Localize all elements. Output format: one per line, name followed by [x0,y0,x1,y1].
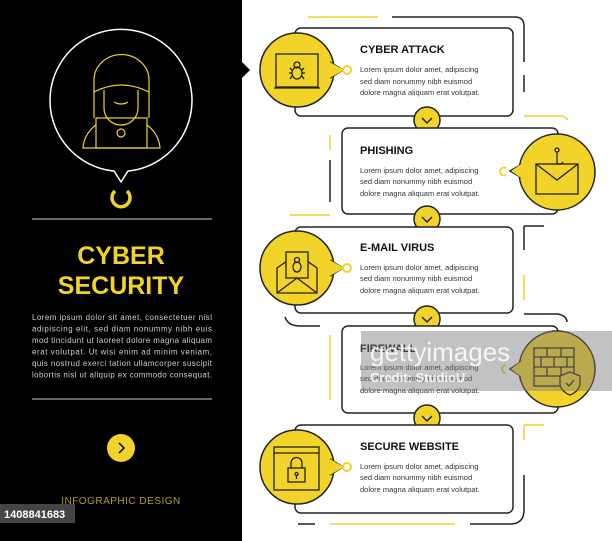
panel: e-mail virus: sed diam nonummy nibh euismod [360,274,472,283]
panel: firewall: dolore magna aliquam erat volutpat. [360,386,480,395]
button: next [107,434,135,462]
panel: e-mail virus: E-MAIL VIRUS [360,242,434,254]
icon: hacker bubble [50,29,192,182]
title: CYBER [77,242,165,270]
icon: yellow ring [112,191,130,207]
title [58,242,185,300]
stock id [0,504,75,523]
panel: firewall: sed diam nonummy nibh euismod [360,374,472,383]
watermark: Credit: StudioU [370,370,465,385]
icon: browser lock [260,430,351,504]
text block: intro: erat volutpat. Ut wisi enim ad minim veniam, [32,348,212,356]
panel: firewall [342,326,595,413]
panel: firewall: FIREWALL [360,343,416,355]
decorative lines [285,17,568,524]
watermark: gettyimages [370,337,510,367]
title: SECURITY [58,272,185,300]
panel: phishing: PHISHING [360,145,413,157]
text block: intro: adipiscing elit, sed diam nonummy nibh euis [32,324,212,334]
panel: secure website: sed diam nonummy nibh euismod [360,473,472,482]
arrow: chevron 2 [414,206,440,232]
panel: cyber attack: dolore magna aliquam erat volutpat. [360,88,480,97]
icon: firewall [502,331,595,407]
panel: e-mail virus: dolore magna aliquam erat volutpat. [360,286,480,295]
panel: phishing: Lorem ipsum dolor amet, adipiscing [360,166,478,175]
panel: cyber attack: CYBER ATTACK [360,44,445,56]
text block: intro [32,313,213,380]
panel: secure website [260,425,513,513]
watermark [361,331,612,391]
panel: firewall: Lorem ipsum dolor amet, adipiscing [360,363,478,372]
text block: intro: quis nostrud exerci tation ullamcorper suscipit [32,359,213,368]
panel: phishing: dolore magna aliquam erat volutpat. [360,189,480,198]
panel: secure website: Lorem ipsum dolor amet, adipiscing [360,462,478,471]
panel: e-mail virus [260,227,513,313]
text block: intro: lobortis nisl ut aliquip ex commodo consequat. [32,370,212,380]
arrow: chevron 3 [414,306,440,332]
icon: mail bug [260,231,351,305]
panel: phishing [342,128,595,214]
panel: secure website: SECURE WEBSITE [360,441,459,453]
panel: phishing: sed diam nonummy nibh euismod [360,177,472,186]
icon: laptop bug [260,33,351,107]
panel: cyber attack [260,28,513,116]
arrow: chevron 1 [414,107,440,133]
text block: intro: Lorem ipsum dolor sit amet, consectetuer nisl [32,313,212,322]
panel: e-mail virus: Lorem ipsum dolor amet, adipiscing [360,263,478,272]
panel: cyber attack: Lorem ipsum dolor amet, adipiscing [360,65,478,74]
icon: phishing envelope [500,134,595,210]
stock id: 1408841683 [4,509,65,521]
text block: intro: mod tincidunt ut laoreet dolore magna aliquam [32,336,212,345]
footer text: INFOGRAPHIC DESIGN [61,496,181,507]
panel: cyber attack: sed diam nonummy nibh euismod [360,77,472,86]
panel: secure website: dolore magna aliquam erat volutpat. [360,485,480,494]
left panel [0,0,250,541]
arrow: chevron 4 [414,405,440,431]
